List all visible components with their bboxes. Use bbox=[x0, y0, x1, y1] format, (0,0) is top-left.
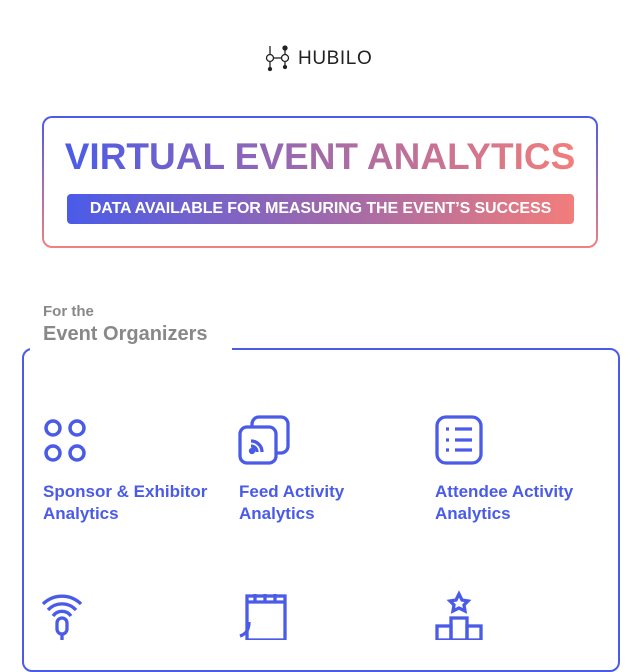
label: feed: Analytics bbox=[239, 504, 315, 523]
heading: Event Organizers bbox=[43, 323, 208, 345]
subtitle pill: DATA AVAILABLE FOR MEASURING THE EVENT’S SUCCESS bbox=[90, 200, 551, 217]
heading: For the bbox=[43, 303, 94, 320]
label: attendee: Analytics bbox=[435, 504, 511, 523]
icon: mic broadcast bbox=[42, 594, 82, 640]
label: feed bbox=[239, 482, 344, 523]
label: attendee bbox=[435, 482, 574, 523]
icon: sponsor circles bbox=[44, 419, 86, 462]
subtitle pill bbox=[67, 194, 574, 224]
title box bbox=[42, 116, 598, 248]
icon: list bbox=[435, 415, 483, 465]
icon: podium bbox=[435, 590, 483, 640]
icon: feed bbox=[238, 415, 290, 465]
logo bbox=[266, 45, 372, 72]
label: sponsor: Sponsor & Exhibitor bbox=[43, 482, 207, 501]
label: feed: Feed Activity bbox=[239, 482, 344, 501]
logo: HUBILO bbox=[298, 48, 372, 69]
heading bbox=[30, 300, 232, 352]
panel: event organizers bbox=[22, 348, 620, 672]
title: VIRTUAL EVENT ANALYTICS bbox=[65, 136, 575, 177]
label: attendee: Attendee Activity bbox=[435, 482, 573, 501]
icon: calendar bbox=[240, 594, 287, 640]
label: sponsor: Analytics bbox=[43, 504, 119, 523]
label: sponsor bbox=[43, 482, 208, 523]
